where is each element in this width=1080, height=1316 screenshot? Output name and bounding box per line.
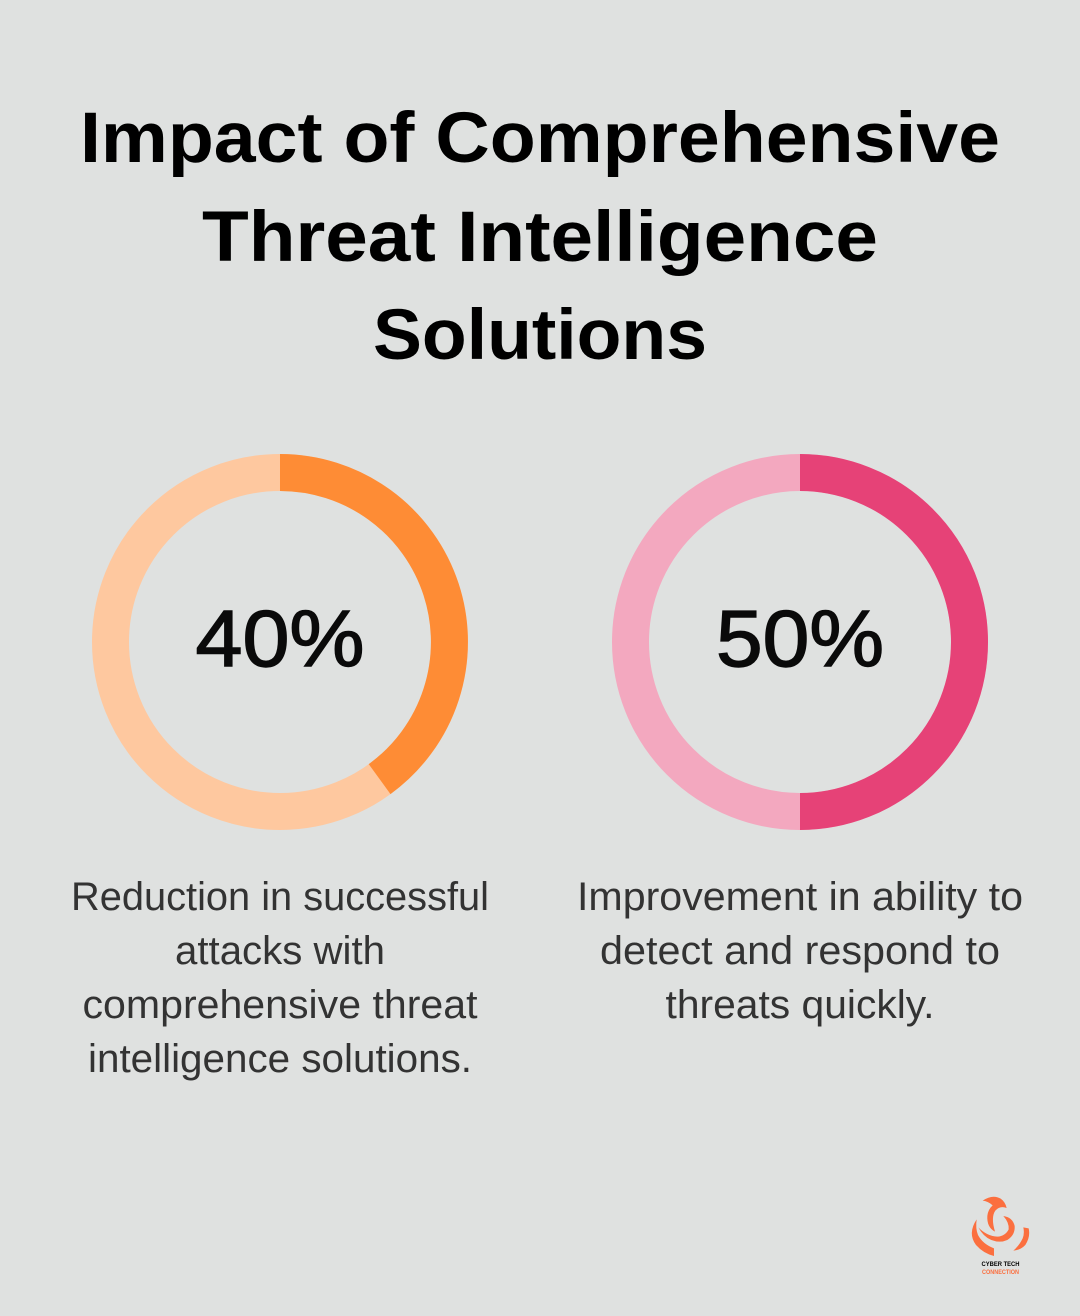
donut chart: 50%	[630, 472, 970, 812]
value: 40%: 40%	[196, 594, 364, 683]
icon: tri-blade swirl	[972, 1197, 1029, 1256]
description: reduction	[71, 875, 489, 1081]
donut chart: 40%	[110, 472, 450, 812]
panel: 40% reduction	[71, 472, 489, 1081]
description: improvement: Improvement in ability to	[577, 875, 1023, 919]
panel: 50% improvement	[577, 472, 1023, 1027]
title: Impact of Comprehensive	[80, 99, 1000, 178]
description: reduction: Reduction in successful	[71, 875, 489, 919]
title	[80, 99, 1000, 375]
logo text: CYBER TECH	[982, 1261, 1020, 1268]
value: 50%: 50%	[716, 594, 884, 683]
description: improvement	[577, 875, 1023, 1027]
description: reduction: attacks with	[175, 929, 385, 973]
description: reduction: intelligence solutions.	[88, 1037, 472, 1081]
logo: Cyber Tech Connection	[972, 1197, 1029, 1276]
title: Solutions	[373, 296, 707, 375]
title: Threat Intelligence	[202, 198, 878, 277]
logo: Cyber Tech Connection: CONNECTION	[982, 1269, 1019, 1276]
description: reduction: comprehensive threat	[82, 983, 478, 1027]
description: improvement: threats quickly.	[666, 983, 934, 1027]
description: improvement: detect and respond to	[600, 929, 1000, 973]
